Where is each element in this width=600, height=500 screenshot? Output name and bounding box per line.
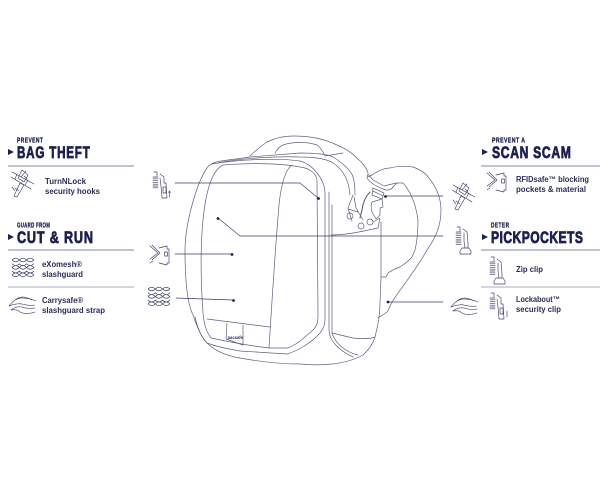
icon: zip clip <box>490 257 505 284</box>
leader: RFID <box>175 253 233 256</box>
text: Carrysafe slashguard strap: slashguard strap <box>42 306 105 315</box>
icon: strap waves <box>9 297 36 314</box>
panel: pickpockets <box>481 223 600 319</box>
panel: scan scam <box>481 137 600 194</box>
leader: front pocket <box>217 217 443 236</box>
leader lines <box>175 183 443 303</box>
panel: bag theft <box>8 138 134 197</box>
heading: prevent bag theft: BAG THEFT <box>17 144 90 163</box>
heading: deter pickpockets: PICKPOCKETS <box>491 229 583 248</box>
bag top and handle <box>207 136 368 195</box>
heading: guard from cut and run: GUARD FROM <box>17 223 50 230</box>
icon: left RFID card <box>150 245 169 265</box>
text: TurnNLock security hooks: security hooks <box>45 187 101 196</box>
heading: prevent bag theft: PREVENT <box>17 138 43 145</box>
illustration: backpack <box>185 136 441 365</box>
text: eXomesh slashguard <box>42 260 83 279</box>
heading: prevent bag theft <box>8 138 90 163</box>
text: zip clip: Zip clip <box>516 265 543 274</box>
heading: prevent a scan scam: SCAN SCAM <box>492 144 571 163</box>
text: Lockabout security clip: security clip <box>516 305 561 314</box>
icon: left lockabout clip <box>153 172 170 198</box>
icon: left mesh <box>148 287 170 306</box>
text: RFIDsafe blocking pockets and material <box>516 175 589 194</box>
text: TurnNLock security hooks: TurnNLock <box>45 177 87 186</box>
text: Lockabout security clip <box>516 295 561 314</box>
panel: cut and run <box>8 223 134 315</box>
icon: right zip clip <box>456 227 471 254</box>
icon: lockabout clip <box>490 293 507 319</box>
heading: guard from cut and run <box>8 223 93 248</box>
heading: prevent a scan scam <box>482 137 571 163</box>
text: RFIDsafe blocking pockets and material: pockets & material <box>516 185 586 194</box>
text: eXomesh slashguard: slashguard <box>42 270 83 279</box>
bag side gusset <box>329 192 381 357</box>
icon: right strap waves <box>451 298 478 314</box>
icon: hook <box>11 170 34 197</box>
leader: hook <box>384 195 443 198</box>
text: Lockabout security clip: Lockabout™ <box>516 295 560 304</box>
text: eXomesh slashguard: eXomesh® <box>42 260 82 269</box>
icon: mesh <box>12 258 34 277</box>
bag front panel <box>185 159 363 365</box>
text: RFIDsafe blocking pockets and material: RFIDsafe™ blocking <box>516 175 589 184</box>
text: Carrysafe slashguard strap: Carrysafe® <box>42 296 83 305</box>
heading: prevent a scan scam: PREVENT A <box>492 137 525 145</box>
heading: guard from cut and run: CUT & RUN <box>17 229 93 248</box>
text: Carrysafe slashguard strap <box>42 296 105 315</box>
brand logo: pacsafe <box>228 335 243 340</box>
leader: lockabout <box>175 183 320 200</box>
heading: deter pickpockets: DETER <box>491 223 510 230</box>
icon: right hook <box>452 183 475 210</box>
shoulder strap <box>368 166 441 318</box>
strap buckle and zipper pulls <box>347 174 397 229</box>
leader: strap <box>387 301 443 303</box>
leader: mesh <box>176 298 235 302</box>
icon: RFID card <box>487 172 506 192</box>
heading: deter pickpockets <box>482 223 583 248</box>
text: TurnNLock security hooks <box>45 177 101 196</box>
